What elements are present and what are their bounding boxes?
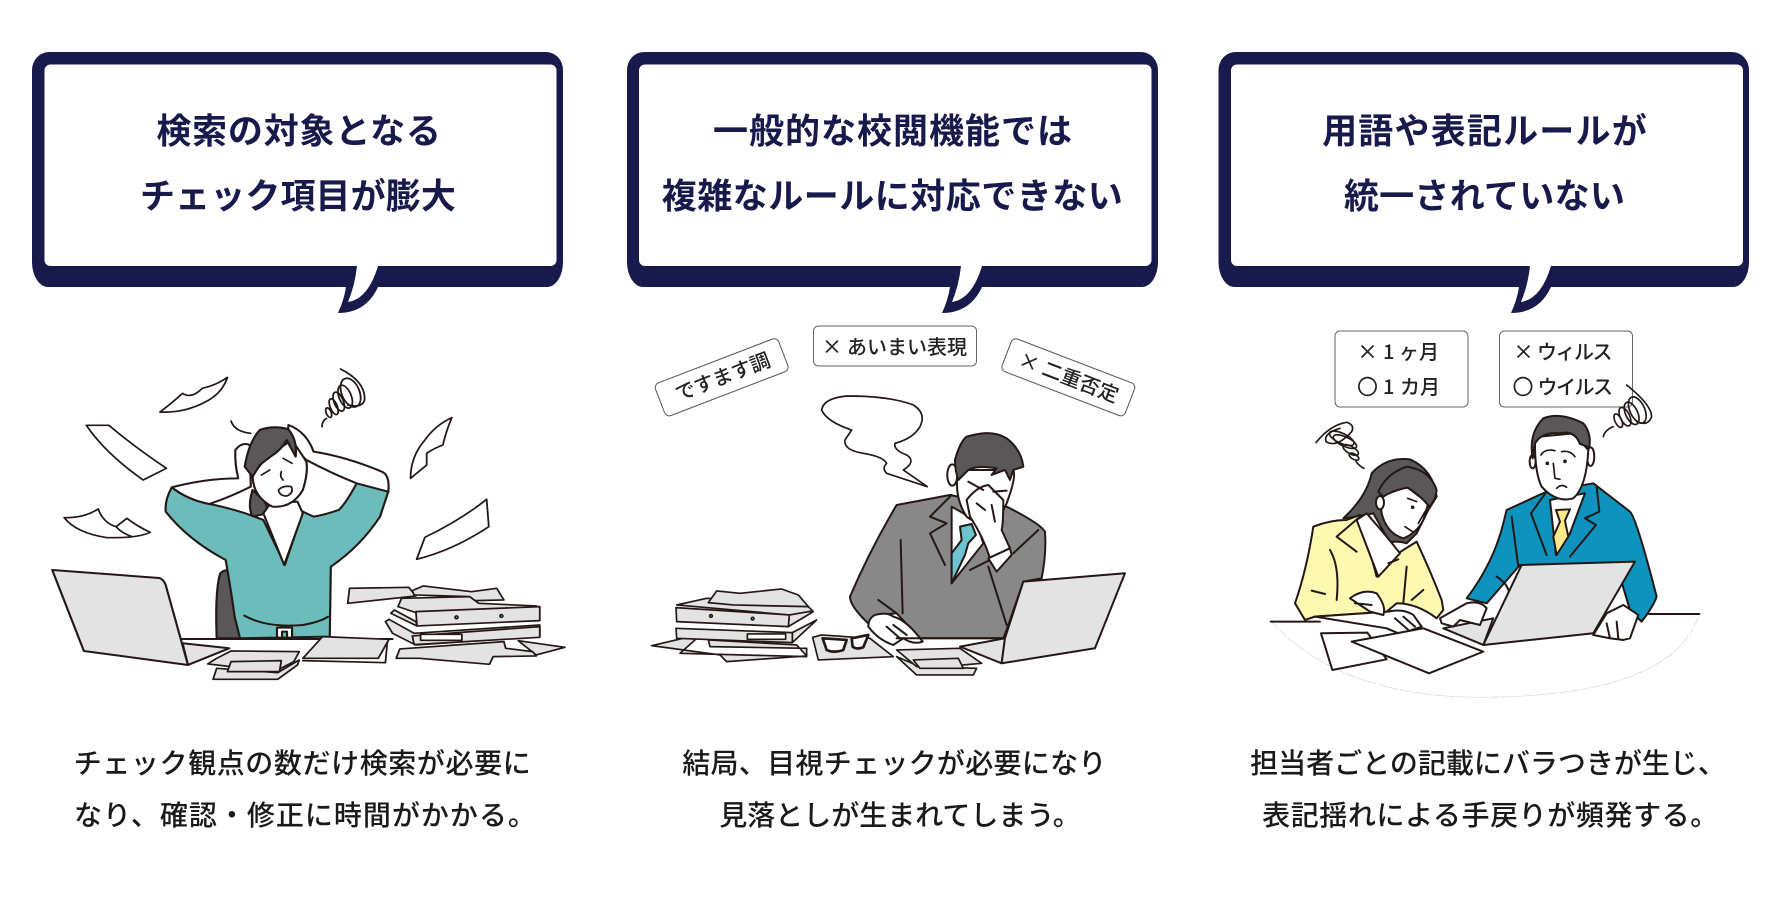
heading 1: チェック項目が膨大 (140, 178, 456, 216)
illustration: tired businessman at desk (652, 396, 1125, 675)
man's hair (1532, 416, 1590, 458)
tag: double negative: 二重否定 (1038, 353, 1124, 408)
heading 2 (662, 112, 1123, 216)
icon: laptop (960, 573, 1125, 663)
paper under glasses (813, 635, 893, 660)
description 1: なり、確認・修正に時間がかかる。 (74, 800, 537, 831)
tag: month notation: 1 (1383, 371, 1394, 400)
icon: squiggle left (1316, 422, 1364, 468)
face (253, 440, 307, 507)
tag: double negative: × (1015, 344, 1044, 378)
shirt and tie (1550, 493, 1585, 555)
heading 1 (140, 112, 456, 216)
document stack (652, 589, 817, 662)
shirt (166, 483, 388, 638)
woman's fringe (1378, 467, 1437, 507)
collar (1312, 513, 1423, 603)
tag: month notation: 1 (1383, 336, 1394, 365)
illustration: two coworkers at a laptop (1271, 385, 1699, 697)
lapels (1497, 487, 1599, 590)
woman's arms and hands (1315, 592, 1422, 634)
description 1: チェック観点の数だけ検索が必要に (74, 748, 531, 779)
panel: inconsistent terminology (1218, 52, 1749, 831)
desk edge (897, 635, 1007, 641)
man's face lines (1541, 450, 1575, 488)
speech bubble 3 (1218, 52, 1749, 313)
neckline (263, 502, 303, 565)
heading 1: 検索の対象となる (156, 112, 442, 152)
tag: month notation (1335, 331, 1468, 407)
description 2: 結局、目視チェックが必要になり (682, 748, 1107, 779)
tag: month notation: ○ (1358, 371, 1378, 400)
belt (244, 616, 328, 638)
tag: ambiguous wording: あいまい表現 (847, 331, 967, 360)
writing hand (868, 614, 923, 645)
tag: month notation: ヶ月 (1399, 336, 1439, 365)
description 3 (1250, 748, 1726, 831)
tag: virus notation: ウイルス (1538, 371, 1612, 400)
flying papers (64, 377, 489, 559)
description 1 (74, 748, 537, 831)
speech bubble 1 (32, 52, 563, 313)
document stack (348, 586, 565, 664)
tag: ambiguous wording: × (822, 331, 842, 360)
tag: ambiguous wording (814, 326, 976, 366)
shirt and tie (952, 507, 983, 583)
panel: checklist too large (32, 52, 565, 831)
illustration: overwhelmed woman at desk (52, 369, 565, 679)
icon: stress squiggle (322, 369, 365, 427)
description 3: 表記揺れによる手戻りが頻発する。 (1262, 800, 1719, 831)
tag: desu-masu (654, 337, 790, 417)
table outline (1272, 614, 1699, 697)
facial features (231, 421, 292, 496)
man's head (1530, 433, 1594, 499)
tag: virus notation: ウィルス (1537, 336, 1612, 365)
icon: laptop (1443, 562, 1635, 645)
heading 2: 一般的な校閲機能では (713, 112, 1073, 152)
description 2 (682, 748, 1107, 831)
woman's blouse (1295, 515, 1443, 620)
papers (1321, 628, 1483, 673)
woman's ear (1376, 496, 1384, 509)
chair (216, 570, 240, 638)
man's jacket (1467, 483, 1657, 622)
tag: virus notation: × (1514, 336, 1534, 365)
woman's hair back (1343, 459, 1437, 543)
sigh bubble (822, 396, 927, 487)
icon: laptop (52, 570, 229, 665)
desk edge (181, 636, 393, 642)
arms (172, 444, 251, 504)
hand on face (967, 482, 1012, 572)
icon: squiggle right (1603, 385, 1652, 437)
paper notebooks (208, 651, 299, 679)
tag: virus notation: ○ (1513, 371, 1533, 400)
tag: double negative (1000, 337, 1136, 417)
hair (245, 427, 296, 477)
table edge (1271, 614, 1699, 622)
description 2: 見落としが生まれてしまう。 (719, 800, 1081, 831)
woman's face lines (1405, 498, 1425, 532)
heading 3 (1322, 112, 1648, 216)
heading 2: 複雑なルールに対応できない (662, 178, 1123, 216)
desk sheet (303, 637, 389, 663)
heading 3: 統一されていない (1344, 178, 1625, 216)
speech bubble 2 (627, 52, 1158, 313)
suit (850, 495, 1045, 638)
lapel and suit lines (878, 495, 1038, 625)
heading 3: 用語や表記ルールが (1322, 112, 1648, 152)
tag: month notation: × (1358, 336, 1378, 365)
panel: standard proofreading can't handle rules (627, 52, 1158, 831)
description 3: 担当者ごとの記載にバラつきが生じ、 (1250, 748, 1726, 779)
woman's face (1380, 487, 1428, 538)
icon: glasses (823, 635, 868, 652)
tag: desu-masu: ですます調 (670, 344, 774, 407)
head (947, 464, 1014, 524)
notebooks (897, 648, 982, 675)
hair (955, 433, 1023, 480)
tag: month notation: カ月 (1400, 371, 1440, 400)
tag: virus notation (1500, 331, 1632, 407)
ponytail (250, 490, 267, 517)
man's hands (1440, 602, 1638, 640)
